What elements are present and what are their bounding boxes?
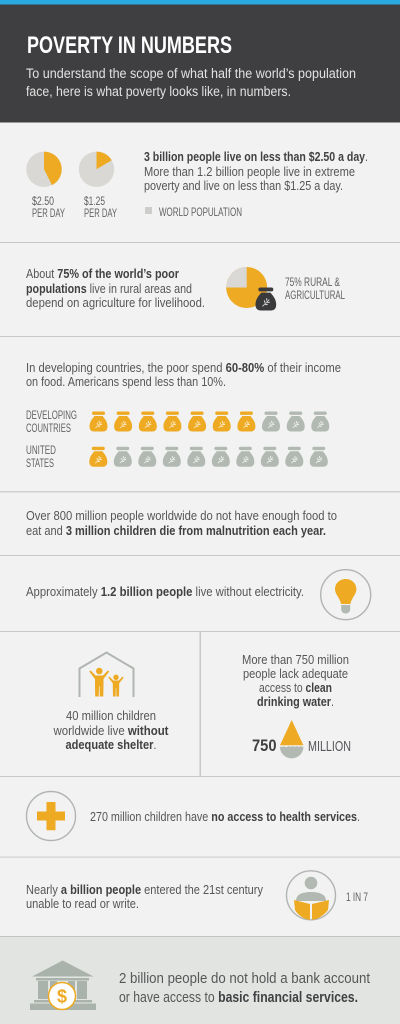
label: rural and agricultural: AGRICULTURAL — [285, 290, 345, 302]
label: rural and agricultural — [285, 277, 345, 302]
water text: More than 750 million — [242, 653, 349, 667]
legend: world population: WORLD POPULATION — [159, 207, 242, 219]
shelter text: 40 million children — [66, 709, 156, 723]
icon: light bulb — [321, 570, 371, 620]
water text: access to clean — [259, 681, 332, 695]
label: developing countries — [26, 410, 77, 435]
panel: income per day — [26, 150, 368, 220]
pictogram: united states bags — [89, 447, 328, 467]
rural text: About 75% of the world’s poor — [26, 267, 179, 281]
label: 1 in 7: 1 IN 7 — [346, 892, 368, 904]
food text — [26, 361, 341, 389]
rural text: populations live in rural areas and — [26, 282, 192, 296]
stat: 750: 750 — [252, 736, 276, 755]
panel: malnutrition text: Over 800 million people worldwide do not have enough food to — [26, 509, 337, 523]
water text: people lack adequate — [243, 667, 348, 681]
icon: bank with coin — [30, 960, 96, 1010]
panel: health services — [26, 792, 360, 840]
pie chart: 2.50 per day — [26, 152, 62, 187]
icon: dark grain bag — [256, 288, 276, 310]
panel: electricity — [26, 570, 371, 620]
icon: adult figure — [89, 668, 109, 696]
icon: water drop — [280, 720, 303, 758]
intro text — [26, 66, 356, 99]
icon: medical cross — [26, 792, 76, 840]
income text: poverty and live on less than $1.25 a day. — [144, 179, 343, 193]
food text: on food. Americans spend less than 10%. — [26, 375, 226, 389]
intro text: To understand the scope of what half the world’s population — [26, 66, 356, 81]
label: united states: UNITED — [26, 445, 56, 457]
rural text: depend on agriculture for livelihood. — [26, 296, 205, 310]
label: developing countries: DEVELOPING — [26, 410, 77, 422]
label: 1.25 per day: PER DAY — [84, 208, 117, 220]
rural text — [26, 267, 205, 310]
panel: shelter — [53, 652, 169, 752]
electricity text: Approximately 1.2 billion people live without electricity. — [26, 585, 304, 599]
income text: More than 1.2 billion people live in extreme — [144, 165, 355, 179]
panel: literacy — [26, 871, 368, 920]
food text: In developing countries, the poor spend 60-80% of their income — [26, 361, 341, 375]
literacy text: Nearly a billion people entered the 21st century — [26, 883, 264, 897]
legend: world population — [145, 207, 242, 219]
income text: 3 billion people live on less than $2.50 a day. — [144, 150, 368, 164]
financial text: or have access to basic financial services. — [119, 990, 358, 1006]
water text: drinking water. — [257, 695, 334, 709]
icon: dollar coin: $ — [57, 986, 67, 1006]
header panel — [0, 0, 400, 123]
financial text: 2 billion people do not hold a bank account — [119, 971, 370, 987]
shelter text: adequate shelter. — [66, 738, 156, 752]
financial text — [119, 971, 370, 1006]
shelter text — [53, 709, 169, 752]
panel: financial services — [0, 936, 400, 1024]
label: rural and agricultural: 75% RURAL & — [285, 277, 340, 289]
literacy text — [26, 883, 264, 911]
icon: person reading — [286, 871, 336, 920]
panel: malnutrition text: eat and 3 million children die from malnutrition each year. — [26, 524, 326, 538]
literacy text: unable to read or write. — [26, 897, 139, 911]
pie chart: 1.25 per day — [79, 152, 114, 187]
income text — [144, 150, 368, 193]
panel: clean water — [242, 653, 351, 758]
shelter text: worldwide live without — [53, 724, 169, 738]
panel: malnutrition text — [26, 509, 337, 538]
pie chart: 75 percent — [226, 267, 267, 308]
label: 1.25 per day — [84, 196, 117, 220]
title: POVERTY IN NUMBERS — [27, 32, 232, 59]
pictogram: developing countries bags — [90, 412, 329, 432]
water text — [242, 653, 349, 709]
intro text: face, here is what poverty looks like, in numbers. — [26, 84, 291, 99]
label: 2.50 per day — [32, 196, 65, 220]
label: united states: STATES — [26, 458, 54, 470]
panel: rural and agricultural — [26, 267, 345, 310]
label: 2.50 per day: $2.50 — [32, 196, 54, 208]
icon: house with children — [80, 652, 134, 697]
label: 2.50 per day: PER DAY — [32, 208, 65, 220]
health text: 270 million children have no access to health services. — [90, 810, 360, 824]
label: united states — [26, 445, 56, 470]
label: 1.25 per day: $1.25 — [84, 196, 105, 208]
icon: child figure — [108, 675, 124, 696]
panel: income on food — [26, 361, 341, 470]
label: developing countries: COUNTRIES — [26, 423, 71, 435]
label: million: MILLION — [308, 739, 351, 755]
